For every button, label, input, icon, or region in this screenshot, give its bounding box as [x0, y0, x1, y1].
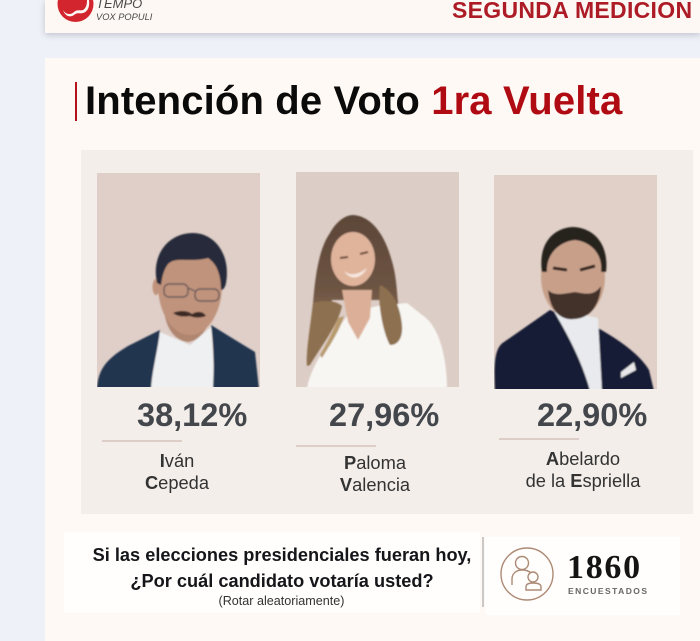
stat: Iván Cepeda: 38,12%: [137, 397, 247, 433]
icon: people: [500, 547, 554, 601]
title accent bar: [75, 82, 76, 121]
name: Iván Cepeda: Iván: [160, 450, 194, 471]
name: Paloma Valencia: [340, 452, 410, 495]
panel: candidates: [81, 150, 693, 514]
name: Abelardo de la Espriella: Abelardo: [546, 448, 620, 469]
name: Abelardo de la Espriella: [526, 448, 640, 491]
name: Iván Cepeda: Cepeda: [145, 472, 209, 493]
logo: Tempo Vox Populi: [58, 0, 152, 22]
note: rotation: (Rotar aleatoriamente): [218, 594, 344, 608]
name: Iván Cepeda: [145, 450, 210, 493]
portrait: Iván Cepeda: [97, 173, 260, 387]
question text: Si las elecciones presidenciales fueran hoy,: [93, 545, 471, 565]
question text: ¿Por cuál candidato votaría usted?: [130, 571, 434, 591]
stat: Paloma Valencia: 27,96%: [329, 397, 439, 433]
header bar: [45, 0, 700, 33]
portrait: Paloma Valencia: [296, 172, 459, 387]
name: Paloma Valencia: Valencia: [340, 474, 410, 495]
name: Paloma Valencia: Paloma: [344, 452, 406, 473]
stat: Abelardo de la Espriella: 22,90%: [537, 397, 647, 433]
question box: [64, 532, 480, 613]
respondents box: [485, 537, 680, 615]
question text: [93, 545, 471, 591]
name: Abelardo de la Espriella: de la Espriella: [526, 470, 640, 491]
title: Intención de Voto 1ra Vuelta: [85, 79, 622, 123]
label: encuestados: ENCUESTADOS: [568, 586, 648, 596]
portrait: Abelardo de la Espriella: [494, 175, 657, 389]
stat: 1860: 1860: [567, 549, 642, 586]
logo: Tempo Vox Populi: VOX POPULI: [96, 12, 152, 22]
